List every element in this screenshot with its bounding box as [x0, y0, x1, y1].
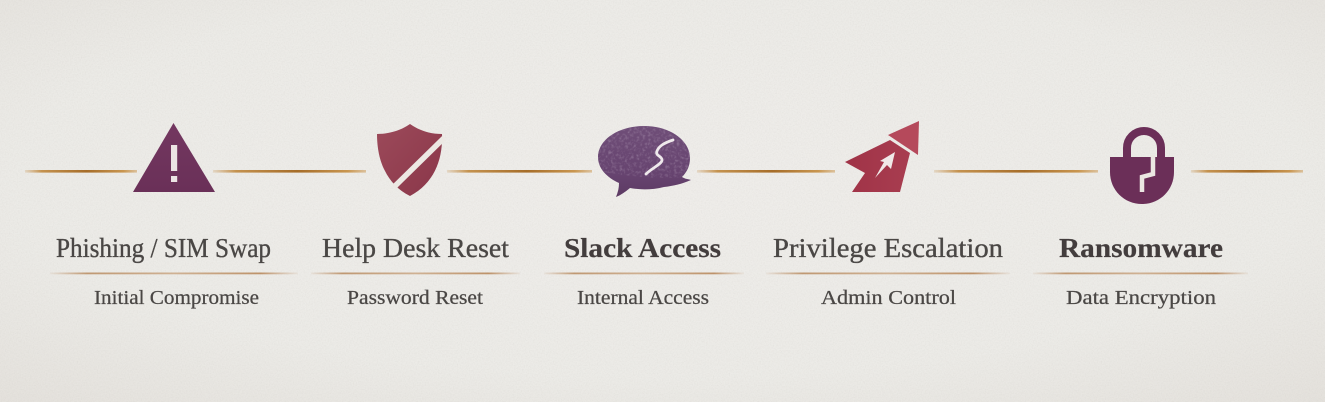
step 5: ransomware [1033, 131, 1248, 309]
subtitle: Data Encryption: Data Encryption [1066, 287, 1216, 309]
icon: split shield [377, 124, 444, 196]
heading: Phishing / SIM Swap: Phishing / SIM Swap [56, 233, 271, 263]
step 4: privilege escalation [766, 121, 1010, 309]
subtitle: Initial Compromise: Initial Compromise [94, 287, 259, 309]
divider rule [766, 272, 1010, 274]
heading: Help Desk Reset: Help Desk Reset [322, 233, 510, 263]
heading: Slack Access: Slack Access [564, 233, 721, 263]
timeline connector lines [25, 170, 1303, 173]
step 2: help desk reset [311, 124, 520, 309]
heading: Privilege Escalation: Privilege Escalation [773, 233, 1004, 263]
subtitle: Internal Access: Internal Access [577, 287, 709, 309]
heading: Ransomware: Ransomware [1059, 233, 1223, 263]
subtitle: Password Reset: Password Reset [347, 287, 483, 309]
divider rule [1033, 272, 1248, 274]
icon: broken padlock [1110, 131, 1174, 204]
divider rule [311, 272, 520, 274]
subtitle: Admin Control: Admin Control [821, 287, 956, 309]
divider rule [544, 272, 744, 274]
icon: speech bubble with squiggle [598, 126, 691, 197]
step 3: slack access [544, 126, 744, 309]
icon: broken upward arrow [845, 121, 919, 192]
divider rule [50, 272, 298, 274]
step 1: phishing / SIM swap [50, 123, 298, 309]
icon: warning triangle [133, 123, 215, 192]
